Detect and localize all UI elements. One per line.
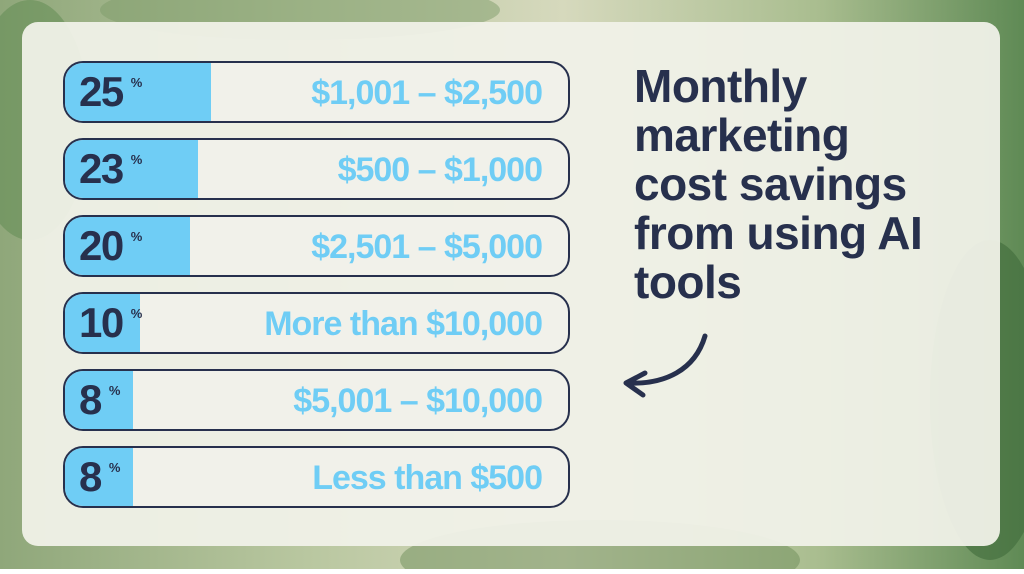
arrow [624,334,708,398]
bar: 23% $500 – $1,000: 23 % [79,145,142,192]
bar: 25% $1,001 – $2,500: 25 % [79,68,142,115]
bar: 8% Less than $500: Less than $500 [312,459,542,497]
title: marketing [634,109,849,161]
bar: 20% $2,501 – $5,000 [63,215,570,277]
title: Monthly [634,60,807,112]
bar: 8% Less than $500: 8 % [79,453,120,500]
bar: 8% Less than $500 [63,446,570,508]
bar: 20% $2,501 – $5,000: $2,501 – $5,000 [311,228,542,266]
bar: 10% More than $10,000 [63,292,570,354]
bar: 8% $5,001 – $10,000 [63,369,570,431]
bar: 10% More than $10,000: 10 % [79,299,142,346]
bar: 10% More than $10,000: More than $10,000 [264,305,542,343]
title: cost savings [634,158,907,210]
title: from using AI [634,207,922,259]
bar: 25% $1,001 – $2,500 [63,61,570,123]
title [634,60,922,308]
bar: 23% $500 – $1,000: $500 – $1,000 [338,151,542,189]
bar: 20% $2,501 – $5,000: 20 % [79,222,142,269]
bar: 8% $5,001 – $10,000: $5,001 – $10,000 [293,382,542,420]
title: tools [634,256,741,308]
bar: 8% $5,001 – $10,000: 8 % [79,376,120,423]
bar: 25% $1,001 – $2,500: $1,001 – $2,500 [311,74,542,112]
bar: 23% $500 – $1,000 [63,138,570,200]
